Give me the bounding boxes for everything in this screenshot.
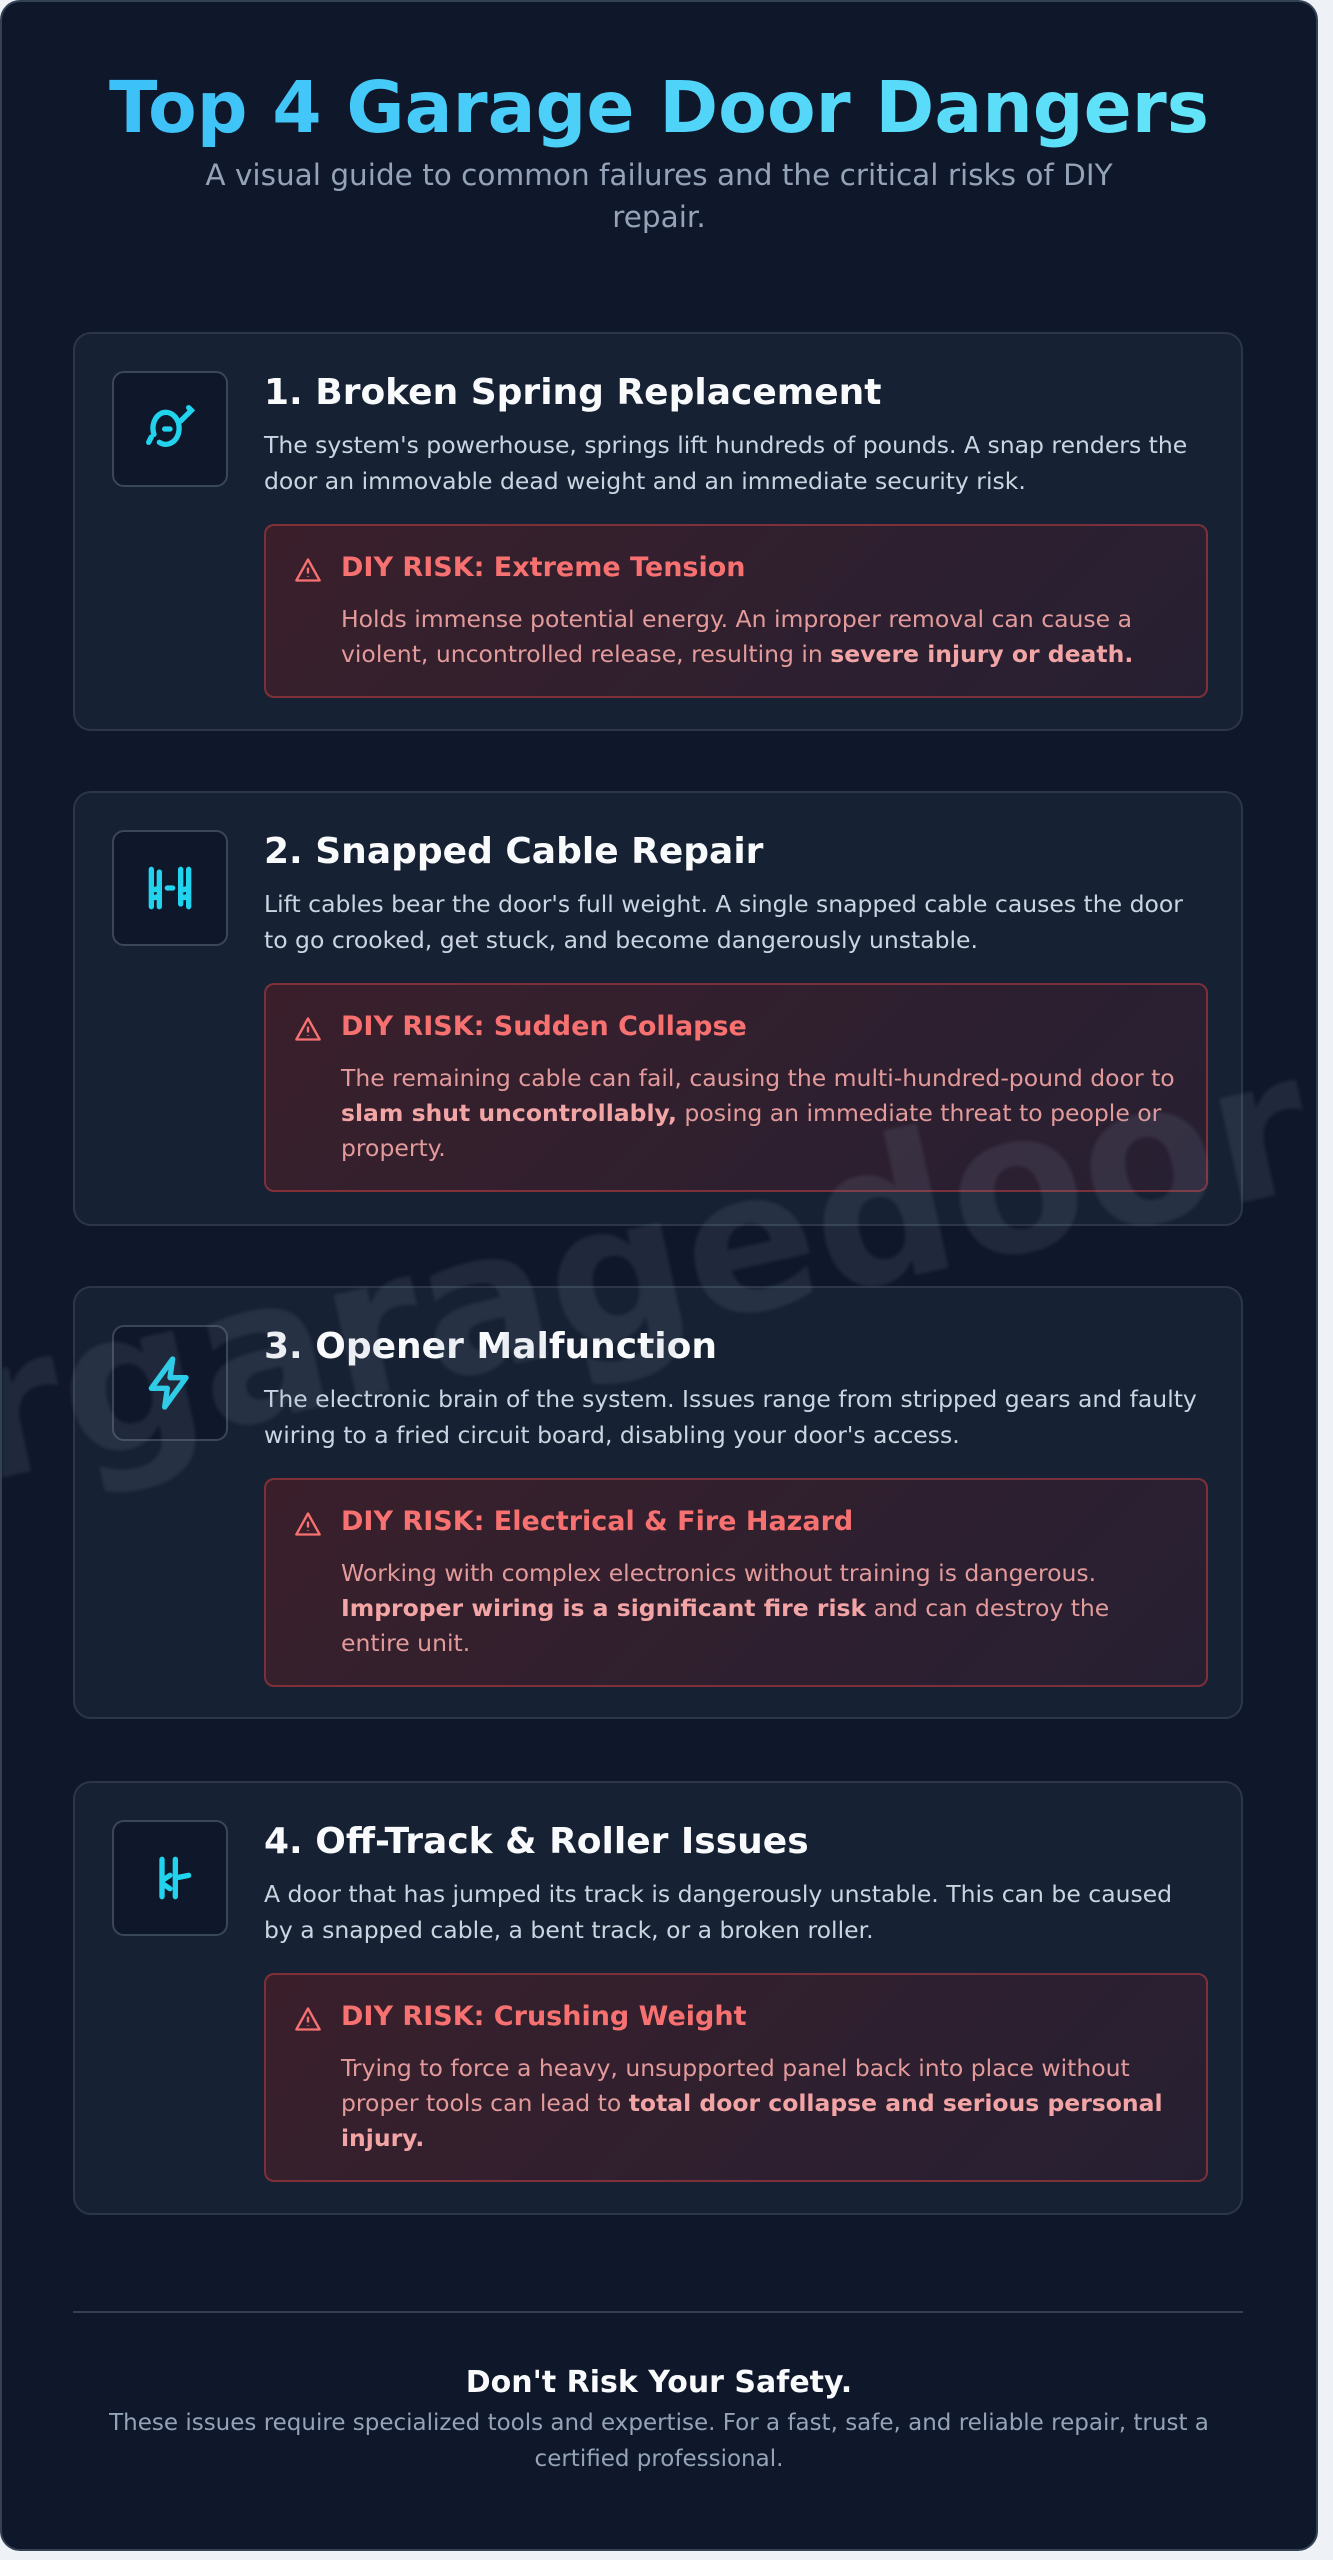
content: 2. Snapped Cable Repair <box>264 831 763 872</box>
content: 3. Opener Malfunction <box>264 1326 717 1367</box>
content <box>264 1821 1208 2182</box>
callout: risk: Working with complex electronics without training is dangerous. Improper wiring is a significant fire risk and can destroy the entire unit. <box>341 1559 1109 1657</box>
title: Top 4 Garage Door Dangers <box>109 66 1209 149</box>
footer text: These issues require specialized tools and expertise. For a fast, safe, and reliable repair, trust a certified professional. <box>109 2410 1209 2472</box>
callout: risk <box>264 1973 1208 2182</box>
icon: spring <box>112 371 228 487</box>
panel: broken spring <box>73 332 1243 731</box>
icon: lightning <box>112 1325 228 1441</box>
footer heading: Don't Risk Your Safety. <box>466 2365 852 2400</box>
icon: cable <box>112 830 228 946</box>
callout: risk: Trying to force a heavy, unsupported panel back into place without proper tools can lead to total door collapse and serious personal injury. <box>341 2054 1163 2152</box>
panel: snapped cable <box>73 791 1243 1226</box>
callout: risk: DIY RISK: Crushing Weight <box>341 2001 747 2032</box>
content <box>264 1326 1208 1687</box>
content: 1. Broken Spring Replacement <box>264 372 882 413</box>
callout: risk: DIY RISK: Electrical & Fire Hazard <box>341 1506 853 1537</box>
content: Lift cables bear the door's full weight. A single snapped cable causes the door to go crooked, get stuck, and become dangerously unstable. <box>264 890 1183 954</box>
callout: risk: Holds immense potential energy. An improper removal can cause a violent, uncontrolled release, resulting in severe injury or death. <box>341 605 1133 668</box>
panel: off-track <box>73 1781 1243 2215</box>
content <box>264 372 1208 698</box>
callout: risk <box>264 524 1208 698</box>
content: 4. Off-Track & Roller Issues <box>264 1821 809 1862</box>
callout: risk: DIY RISK: Sudden Collapse <box>341 1011 747 1042</box>
content: The electronic brain of the system. Issues range from stripped gears and faulty wiring to a fried circuit board, disabling your door's access. <box>264 1385 1197 1449</box>
content: A door that has jumped its track is dangerously unstable. This can be caused by a snapped cable, a bent track, or a broken roller. <box>264 1880 1172 1944</box>
callout: risk <box>264 983 1208 1192</box>
panel: opener <box>73 1286 1243 1719</box>
content <box>264 831 1208 1192</box>
callout: risk: DIY RISK: Extreme Tension <box>341 552 746 583</box>
icon: track <box>112 1820 228 1936</box>
subtitle: A visual guide to common failures and the critical risks of DIY repair. <box>205 158 1113 234</box>
callout: risk: The remaining cable can fail, causing the multi-hundred-pound door to slam shut uncontrollably, posing an immediate threat to people or property. <box>341 1064 1175 1162</box>
callout: risk <box>264 1478 1208 1687</box>
content: The system's powerhouse, springs lift hundreds of pounds. A snap renders the door an immovable dead weight and an immediate security risk. <box>264 431 1187 495</box>
